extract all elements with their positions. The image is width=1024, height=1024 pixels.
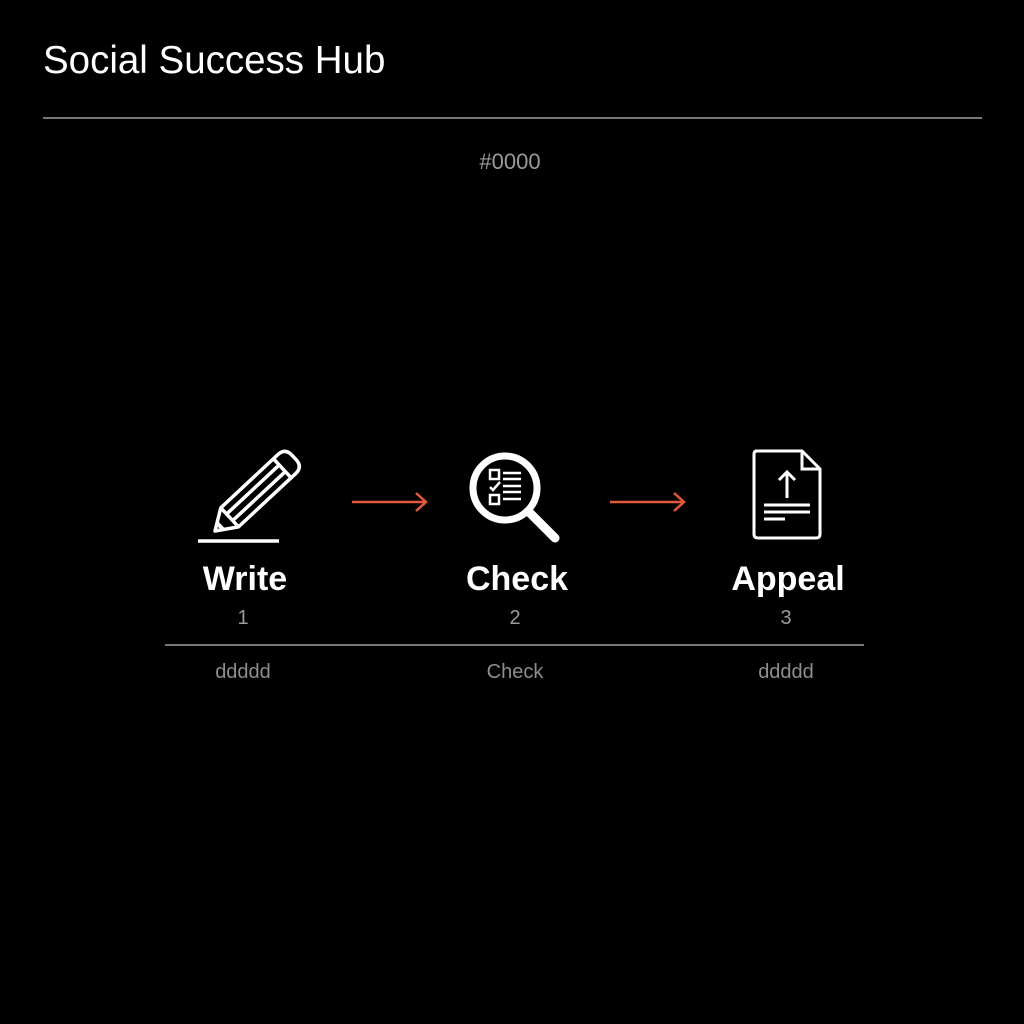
- process flow: 3: [780, 607, 792, 629]
- arrow 1: [352, 492, 428, 512]
- icon: pencil: [198, 450, 302, 543]
- arrow 2: [610, 492, 686, 512]
- step numbers: 1: [237, 607, 249, 629]
- step descriptions: ddddd: [215, 661, 271, 683]
- icon: magnifier checklist: [470, 452, 560, 542]
- process flow: Appeal: [731, 560, 845, 598]
- process flow: ddddd: [758, 661, 814, 683]
- step labels: Write: [203, 560, 287, 598]
- process flow: 2: [509, 607, 521, 629]
- icon: document upload: [752, 450, 822, 540]
- process flow: [165, 450, 864, 683]
- process flow: Check: [487, 661, 543, 683]
- subtitle code: #0000: [479, 149, 541, 174]
- process flow: Check: [466, 560, 568, 598]
- title: Social Success Hub: [43, 39, 385, 82]
